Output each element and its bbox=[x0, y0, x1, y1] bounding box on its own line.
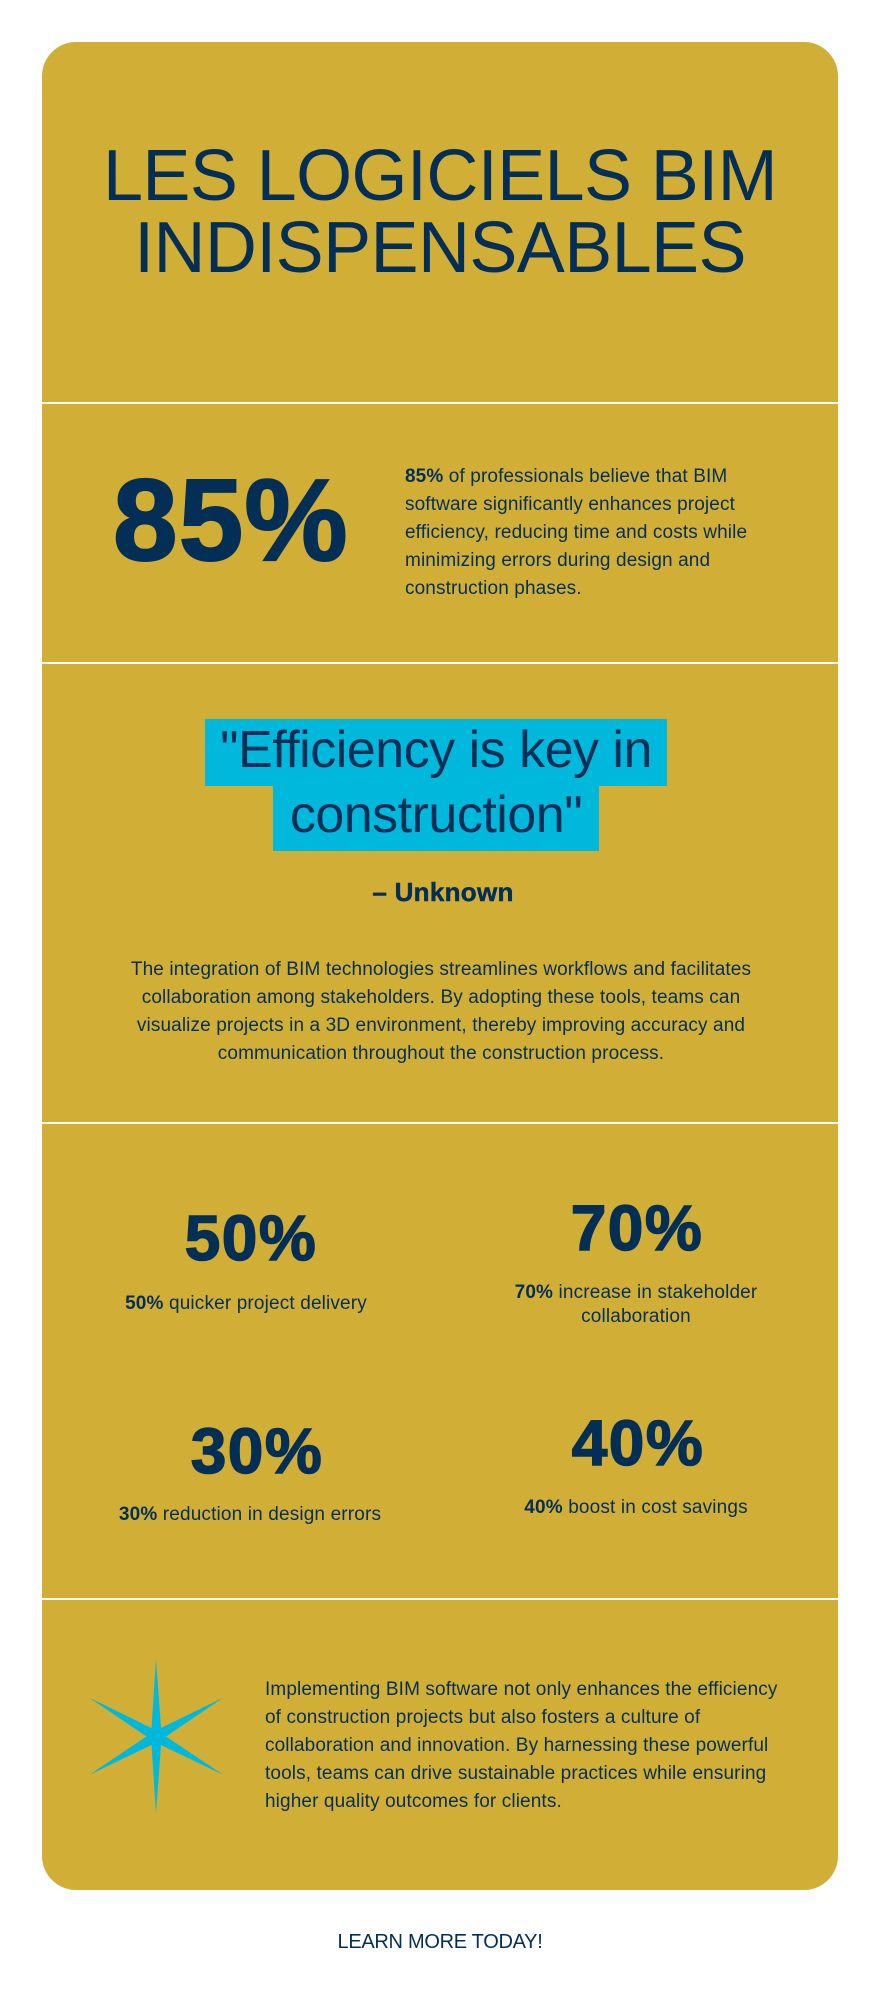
text block: conclusion: collaboration and innovation. By harnessing these powerful bbox=[265, 1735, 768, 1756]
title: LES LOGICIELS BIM bbox=[103, 136, 777, 216]
text block: BIM integration: collaboration among stakeholders. By adopting these tools, teams can bbox=[142, 987, 740, 1008]
stat label: 70% bbox=[515, 1282, 757, 1327]
text block: 85% explanation: efficiency, reducing time and costs while bbox=[405, 522, 747, 543]
quote attribution: – Unknown bbox=[372, 877, 514, 907]
stat: 30%: 30% bbox=[191, 1415, 323, 1487]
text block: BIM integration: visualize projects in a 3D environment, thereby improving accuracy and bbox=[137, 1015, 745, 1036]
text block: conclusion: Implementing BIM software not only enhances the efficiency bbox=[265, 1679, 778, 1700]
text block: conclusion: higher quality outcomes for clients. bbox=[265, 1791, 562, 1812]
big stat: 85%: 85% bbox=[113, 455, 349, 585]
footer call to action: LEARN MORE TODAY! bbox=[338, 1931, 542, 1953]
icon: six-pointed cyan star bbox=[89, 1660, 224, 1814]
text block: 85% explanation: construction phases. bbox=[405, 578, 582, 599]
stat: 50%: 50% bbox=[185, 1202, 317, 1274]
quote with highlight: "Efficiency is key in bbox=[220, 721, 652, 779]
stat label: 50%: 50% quicker project delivery bbox=[125, 1293, 367, 1314]
stat: 70%: 70% bbox=[571, 1192, 703, 1264]
stat: 40%: 40% bbox=[572, 1407, 704, 1479]
text block: BIM integration: The integration of BIM technologies streamlines workflows and facilitates bbox=[131, 959, 751, 980]
text block: BIM integration bbox=[131, 959, 751, 1064]
text block: 85% explanation: software significantly enhances project bbox=[405, 494, 735, 515]
text block: BIM integration: communication throughout the construction process. bbox=[218, 1043, 664, 1064]
stat label: 70%: collaboration bbox=[581, 1306, 691, 1327]
text block: conclusion: of construction projects but also fosters a culture of bbox=[265, 1707, 700, 1728]
title: INDISPENSABLES bbox=[134, 208, 746, 288]
stat label: 70%: 70% increase in stakeholder bbox=[515, 1282, 757, 1303]
quote with highlight bbox=[205, 719, 667, 851]
text block: 85% explanation: 85% of professionals believe that BIM bbox=[405, 466, 727, 487]
quote with highlight: construction" bbox=[290, 786, 582, 844]
text block: conclusion: tools, teams can drive sustainable practices while ensuring bbox=[265, 1763, 766, 1784]
text block: 85% explanation: minimizing errors during design and bbox=[405, 550, 710, 571]
title bbox=[103, 136, 777, 288]
text block: conclusion bbox=[265, 1679, 778, 1812]
text block: 85% explanation bbox=[405, 466, 747, 599]
stat label: 30%: 30% reduction in design errors bbox=[119, 1504, 381, 1525]
stat label: 40%: 40% boost in cost savings bbox=[524, 1497, 748, 1518]
